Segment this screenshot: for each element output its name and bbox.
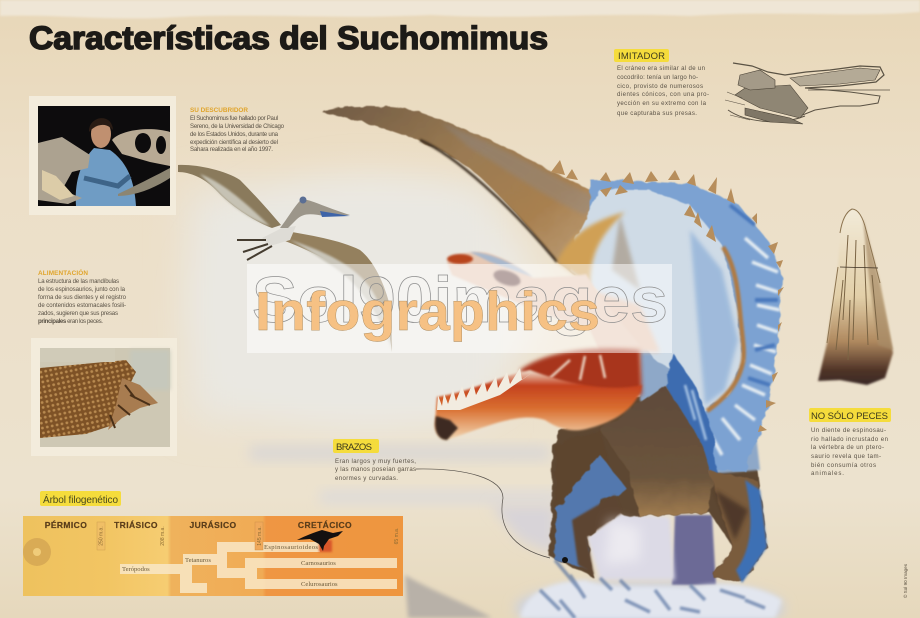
tail upper shading xyxy=(440,122,600,215)
fossil tooth xyxy=(818,209,893,385)
text block: alimentación: principales eran los peces. xyxy=(38,318,103,325)
front leg blue xyxy=(555,455,628,570)
text block: no sólo peces: rio hallado incrustado en xyxy=(811,436,888,443)
pale torso xyxy=(570,190,743,412)
origin disc xyxy=(23,538,51,566)
era labels: CRETÁCICO xyxy=(298,520,352,530)
text block: imitador: El cráneo era similar al de un xyxy=(617,65,705,72)
suchomimus illustration xyxy=(322,106,785,618)
ground splash shadow xyxy=(515,582,785,618)
text block: alimentación: forma de sus dientes y el registro xyxy=(38,294,127,301)
clade labels: Tetanuros xyxy=(185,557,211,564)
clade labels: Carnosaurios xyxy=(301,560,336,567)
heading: NO SÓLO PECES xyxy=(811,411,888,422)
splash white spray xyxy=(605,520,640,565)
era labels xyxy=(45,520,352,530)
icon: crocodile skull sketch xyxy=(725,63,890,124)
era labels: JURÁSICO xyxy=(189,520,237,530)
photo: fish fossil xyxy=(31,338,177,456)
text block: no sólo peces: Un diente de espinosau- xyxy=(811,427,886,434)
watermark panel: Sol90images xyxy=(252,263,668,336)
text block: imitador xyxy=(614,49,709,117)
era bar xyxy=(23,516,403,596)
head blue top xyxy=(470,252,533,277)
date markers: 65 m.a. xyxy=(394,528,400,544)
frill dark stripes xyxy=(730,205,778,385)
frill outer xyxy=(590,180,782,470)
phylogenetic timeline chart xyxy=(23,516,403,596)
clade labels: Terópodos xyxy=(122,566,150,573)
text block: alimentación: ALIMENTACIÓN xyxy=(38,268,88,277)
text block: imitador: cico, provisto de numerosos xyxy=(617,83,703,90)
brown chest xyxy=(600,385,712,517)
text block: su descubridor: de los Estados Unidos, durante una xyxy=(190,131,279,138)
torso brown crease xyxy=(612,215,640,290)
far leg xyxy=(672,515,716,585)
text block: no sólo peces: la vértebra de un ptero- xyxy=(811,444,884,451)
text block: su descubridor: expedición científica al desierto del xyxy=(190,139,278,146)
mouth interior xyxy=(520,348,642,398)
text block: no sólo peces: saurio revela que tam- xyxy=(811,453,881,460)
heading: BRAZOS xyxy=(336,442,372,453)
water splash xyxy=(520,580,782,618)
rear leg dark xyxy=(715,490,748,540)
head upper jaw xyxy=(447,252,640,352)
lower jaw xyxy=(435,370,642,440)
text block: brazos: enormes y curvadas. xyxy=(335,475,398,482)
clade labels: Celurosaurios xyxy=(301,581,338,588)
tooth outline xyxy=(827,209,880,343)
text block: su descubridor: SU DESCUBRIDOR xyxy=(190,107,248,114)
torso blue shading xyxy=(690,230,738,405)
text block: alimentación: La estructura de las mandíbulas xyxy=(38,278,119,285)
text block: no sólo peces: animales. xyxy=(811,470,844,477)
text block: alimentación xyxy=(38,268,127,325)
text block: su descubridor: Sahara realizada en el año 1997. xyxy=(190,146,273,153)
text block: imitador: cocodrilo: tenía un largo ho- xyxy=(617,74,698,81)
tooth ridges xyxy=(836,235,878,360)
text block: brazos xyxy=(333,439,416,482)
tooth right shade xyxy=(863,218,893,350)
callout line to claw xyxy=(416,469,568,563)
flank highlights xyxy=(685,385,706,440)
text block: alimentación: de contenidos estomacales fosili- xyxy=(38,302,126,309)
heading: árbol filogenético xyxy=(40,491,121,506)
tail xyxy=(322,106,610,275)
snout red tip xyxy=(447,254,473,264)
clade labels xyxy=(122,544,338,588)
date markers: 145 m.a. xyxy=(257,526,263,546)
frill spine band xyxy=(707,247,744,411)
branches xyxy=(120,542,397,593)
text block: brazos: y las manos poseían garras xyxy=(335,466,416,473)
text block: imitador: que capturaba sus presas. xyxy=(617,110,697,117)
near wing xyxy=(280,230,392,352)
mouth folds xyxy=(550,355,605,380)
era labels: TRIÁSICO xyxy=(114,520,158,530)
spines xyxy=(551,160,784,432)
splash blue flecks xyxy=(540,560,765,618)
neck and head xyxy=(280,199,350,228)
text block: imitador: yección en su extremo con la xyxy=(617,100,707,107)
lower body base xyxy=(550,380,767,583)
body and legs xyxy=(262,226,296,246)
head dark patch xyxy=(492,267,522,289)
body backing xyxy=(640,340,760,475)
icon: dinosaur silhouette xyxy=(297,530,343,552)
date markers: 250 m.a. xyxy=(98,526,104,546)
text block: brazos: Eran largos y muy fuertes, xyxy=(335,458,416,465)
heading: árbol filogenético: Árbol filogenético xyxy=(43,493,118,506)
lower teeth xyxy=(437,368,533,410)
rear leg blue xyxy=(736,480,767,583)
lower jaw tip xyxy=(435,416,458,440)
copyright: © Sol 90 Images xyxy=(902,563,908,598)
blue flank xyxy=(665,353,745,520)
text block: su descubridor: Sereno, de la Universidad de Chicago xyxy=(190,123,285,130)
date markers xyxy=(97,522,400,550)
era labels: PÉRMICO xyxy=(45,520,87,530)
front leg brown xyxy=(572,495,622,575)
tooth crack xyxy=(840,267,878,268)
date markers: 208 m.a. xyxy=(160,526,166,546)
mist behind legs xyxy=(587,513,675,580)
tail dark edge xyxy=(420,140,557,262)
text block: imitador: dientes cónicos, con una pro- xyxy=(617,91,709,98)
rear leg lower xyxy=(708,470,767,583)
text block: no sólo peces: bién consumía otros xyxy=(811,462,876,469)
front leg xyxy=(555,430,610,510)
text block: alimentación: zados, sugieren que sus presas xyxy=(38,310,118,317)
text block: su descubridor: El Suchomimus fue hallado por Paul xyxy=(190,115,278,122)
title: Características del Suchomimus xyxy=(29,20,548,56)
frill stripes xyxy=(708,238,780,455)
far wing xyxy=(178,165,281,228)
neck peach xyxy=(590,290,660,352)
photo: Paul Sereno with skulls xyxy=(29,96,176,215)
clade labels: Espinosaurioideos xyxy=(264,544,318,551)
text block: su descubridor xyxy=(190,107,285,153)
heading: IMITADOR xyxy=(618,51,665,62)
pterosaur xyxy=(178,165,392,352)
text block: alimentación: de los espinosaurios, junto con la xyxy=(38,286,126,293)
watermark panel: Infographics xyxy=(255,280,600,342)
shoulder cream xyxy=(557,212,625,285)
text block: no sólo peces xyxy=(809,408,891,477)
